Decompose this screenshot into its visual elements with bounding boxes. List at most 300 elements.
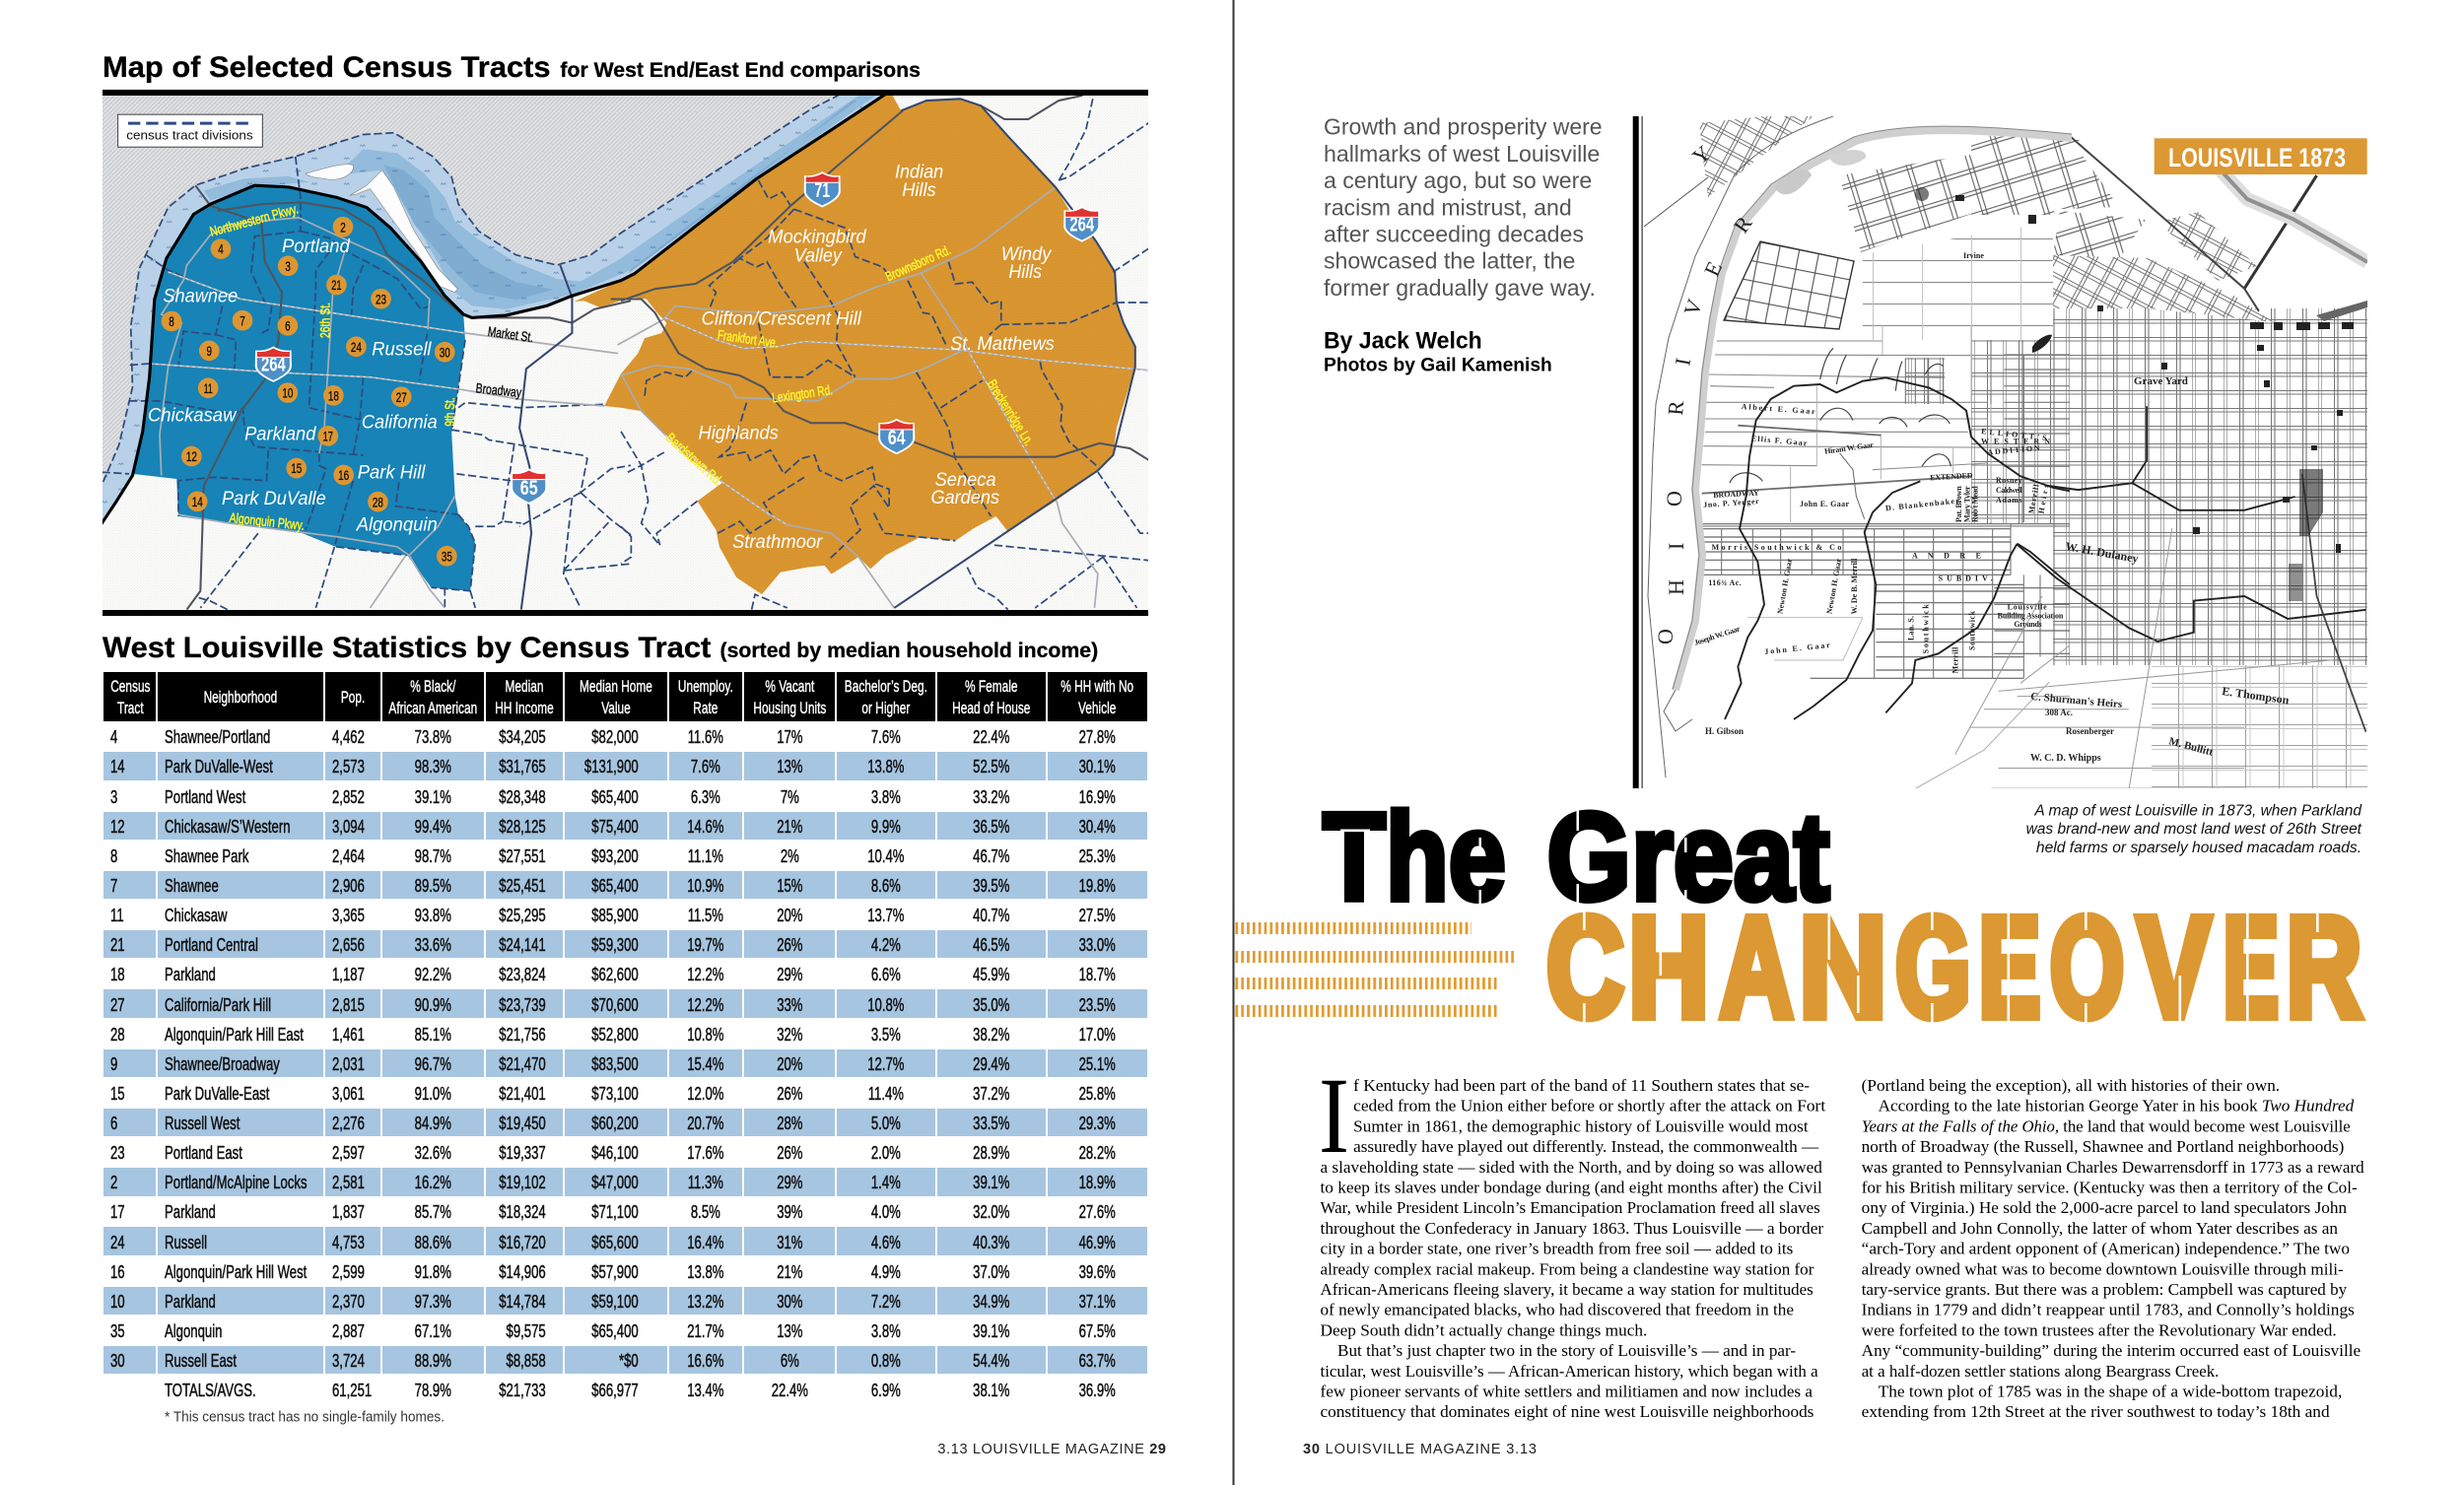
article column 1: ceded from the Union either before or shortly after the attack on Fort: [1353, 1097, 1825, 1115]
row: tract 30: [103, 1346, 1147, 1374]
row: tract 30: 3,724: [332, 1350, 365, 1371]
row: tract 2: 29%: [777, 1172, 802, 1192]
row: tract 6: 84.9%: [415, 1113, 451, 1133]
article column 1: already complex racial makeup. From being a clandestine way station for: [1321, 1259, 1814, 1278]
row: tract 14: 30.1%: [1078, 756, 1115, 776]
pseudo field labels: ELLIOTT'S: [1981, 427, 2048, 442]
row: tract 28: 32%: [777, 1024, 802, 1045]
table header row: Median Home: [580, 678, 652, 696]
road labels: Algonquin Pkwy.: [229, 510, 306, 533]
row: totals and averages: [165, 1380, 1116, 1400]
row: tract 18: 12.2%: [687, 964, 723, 984]
row: tract 18: $23,824: [499, 964, 546, 984]
rail lines: [2244, 175, 2317, 289]
row: tract 9: 96.7%: [415, 1053, 451, 1074]
article column 2: tary-service grants. But there was a problem: Campbell was captured by: [1862, 1280, 2348, 1299]
row: tract 12: 14.6%: [687, 816, 723, 837]
road labels: Northwestern Pkwy.: [208, 201, 300, 239]
row: tract 3: 33.2%: [973, 786, 1009, 807]
article column 1: a slaveholding state — sided with the North, and by doing so was allowed: [1321, 1158, 1822, 1177]
row: tract 7: 7: [110, 875, 117, 896]
row: tract 27: $23,739: [499, 994, 546, 1015]
row: tract 8: 46.7%: [973, 845, 1009, 866]
row: tract 12: $28,125: [499, 816, 546, 837]
neighborhood labels: Parkland: [244, 424, 317, 444]
neighborhood labels: Mockingbird: [768, 228, 867, 248]
pseudo field labels: A N D R E: [1912, 552, 1981, 561]
row: tract 27: [103, 989, 1147, 1018]
row: tract 4: 27.8%: [1078, 726, 1115, 747]
row: tract 15: 12.0%: [687, 1083, 723, 1104]
byline: Photos by Gail Kamenish: [1324, 354, 1552, 375]
byline: [1324, 327, 1552, 375]
article column 1: to keep its slaves under bondage during (and eight months after) the Civil: [1321, 1179, 1822, 1196]
row: tract 14: [103, 752, 1147, 780]
row: tract 2: 2: [110, 1172, 117, 1192]
row: tract 27: 10.8%: [867, 994, 905, 1015]
row: tract 3: 6.3%: [691, 786, 720, 807]
pseudo field labels: D. Blankenbaker: [1885, 496, 1960, 512]
row: tract 14: 2,573: [332, 756, 365, 776]
row: tract 9: [103, 1049, 1147, 1077]
row: tract 9: $21,470: [499, 1053, 546, 1074]
row: totals and averages: 61,251: [332, 1380, 372, 1400]
street labels: Broadway: [475, 380, 522, 400]
headline: The Great: [1323, 787, 1829, 926]
row: tract 28: 85.1%: [415, 1024, 451, 1045]
row: tract 28: 10.8%: [687, 1024, 723, 1045]
row: tract 21: $24,141: [499, 934, 546, 955]
row: tract 14: 13.8%: [867, 756, 905, 776]
row: tract 2: Portland/McAlpine Locks: [165, 1172, 307, 1192]
article column 1: f Kentucky had been part of the band of 11 Southern states that se-: [1353, 1076, 1810, 1095]
row: tract 35: 67.5%: [1078, 1320, 1115, 1341]
pseudo field labels: Building Association: [1998, 612, 2064, 621]
sand bars: [1776, 171, 1812, 195]
row: tract 7: 8.6%: [871, 875, 901, 896]
heading: map of selected census tracts: Map of Selected Census Tracts: [103, 51, 551, 84]
row: tract 15: 3,061: [332, 1083, 365, 1104]
row: tract 16: Algonquin/Park Hill West: [165, 1261, 307, 1282]
row: tract 6: [103, 1109, 1147, 1136]
tract number markers: 9: [207, 344, 212, 359]
row: tract 11: 40.7%: [973, 905, 1009, 925]
headline: Changeover: R: [2287, 888, 2361, 1046]
table header row: Rate: [693, 700, 718, 717]
row: tract 30: 30: [110, 1350, 125, 1371]
row: tract 4: 4,462: [332, 726, 365, 747]
map letters and names: I: [1670, 356, 1695, 368]
row: tract 10: $14,784: [499, 1291, 546, 1312]
row: tract 8: [110, 845, 1116, 866]
row: tract 18: $62,600: [591, 964, 639, 984]
label: Louisville 1873: LOUISVILLE 1873: [2168, 143, 2346, 172]
interstate shields: 64: [888, 426, 906, 449]
row: tract 7: Shawnee: [165, 875, 219, 896]
pseudo field labels: Ellis F. Gaar: [1750, 434, 1808, 447]
row: tract 28: $21,756: [499, 1024, 546, 1045]
row: tract 23: $46,100: [591, 1142, 639, 1163]
neighborhood labels: California: [362, 412, 438, 433]
tract number markers: 24: [351, 340, 362, 355]
table header row: % HH with No: [1061, 678, 1133, 696]
tract number markers: 16: [338, 468, 349, 483]
row: tract 10: Parkland: [165, 1291, 216, 1312]
row: tract 30: 6%: [780, 1350, 798, 1371]
row: tract 24: $65,600: [591, 1232, 639, 1252]
tract number markers: 7: [240, 313, 245, 328]
intro deck text: racism and mistrust, and: [1324, 194, 1572, 220]
map caption: A map of west Louisville in 1873, when Parkland: [2033, 802, 2362, 819]
row: tract 27: 35.0%: [973, 994, 1009, 1015]
tract number markers: 35: [442, 549, 452, 564]
row: tract 9: $83,500: [591, 1053, 639, 1074]
row: tract 14: 14: [110, 756, 125, 776]
row: tract 9: 25.1%: [1078, 1053, 1115, 1074]
row: tract 7: 10.9%: [687, 875, 723, 896]
row: tract 17: 85.7%: [415, 1201, 451, 1222]
row: tract 9: 29.4%: [973, 1053, 1009, 1074]
table header row: Median: [505, 678, 543, 696]
tract number markers: 6: [285, 319, 291, 334]
row: tract 30: Russell East: [165, 1350, 237, 1371]
row: tract 11: 11: [110, 905, 124, 925]
row: tract 14: $131,900: [584, 756, 639, 776]
map letters and names: W. H. Dulaney: [2064, 539, 2140, 566]
article column 2: extending from 12th Street at the river southwest to today’s 18th and: [1862, 1402, 2330, 1421]
row: tract 16: 16: [110, 1261, 125, 1282]
row: tract 3: [110, 786, 1116, 807]
pseudo field labels: Albert E. Gaar: [1742, 402, 1815, 416]
pseudo field labels: Rosney: [1996, 476, 2022, 485]
neighborhood labels: Park Hill: [358, 462, 426, 483]
headline: The Great: The: [1323, 787, 1506, 926]
row: tract 3: $65,400: [591, 786, 639, 807]
pseudo field labels: Adams: [1996, 496, 2022, 505]
road labels: Frankfort Ave.: [717, 327, 780, 351]
row: tract 21: 26%: [777, 934, 802, 955]
row: tract 18: 18: [110, 964, 125, 984]
row: tract 2: 1.4%: [871, 1172, 901, 1192]
indiana hatch area: [99, 89, 879, 493]
article column 2: ony of Virginia.) He sold the 2,000-acre parcel to land speculators John: [1862, 1198, 2348, 1217]
map letters and names: Rosenberger: [2066, 726, 2114, 736]
pseudo field labels: WESTERN: [1981, 438, 2050, 446]
table header row: Bachelor’s Deg.: [845, 678, 927, 696]
table header row: HH Income: [495, 700, 554, 717]
row: tract 6: Russell West: [165, 1113, 240, 1133]
row: tract 2: 39.1%: [973, 1172, 1009, 1192]
row: totals and averages: 36.9%: [1078, 1380, 1115, 1400]
legend: census tract divisions: [118, 114, 262, 147]
pseudo field labels: 116¾ Ac.: [1708, 578, 1742, 587]
map letters and names: M. Bullitt: [2167, 735, 2215, 759]
pseudo field labels: Merrill: [1951, 646, 1960, 673]
row: tract 4: 11.6%: [688, 726, 723, 747]
tract number markers: 18: [328, 389, 339, 404]
article column 2: Indians in 1779 and didn’t reappear until 1783, and Connolly’s holdings: [1862, 1301, 2355, 1319]
pseudo field labels: EXTENDED: [1930, 471, 1973, 482]
row: tract 35: 67.1%: [415, 1320, 451, 1341]
row: tract 17: Parkland: [165, 1201, 216, 1222]
row: tract 17: 32.0%: [973, 1201, 1009, 1222]
row: tract 24: 16.4%: [687, 1232, 723, 1252]
row: tract 18: 18.7%: [1078, 964, 1115, 984]
tract number markers: 30: [440, 345, 450, 360]
row: tract 27: California/Park Hill: [165, 994, 271, 1015]
article column 1: constituency that dominates eight of nine west Louisville neighborhoods: [1321, 1402, 1814, 1421]
pseudo field labels: Louisville: [2008, 602, 2047, 611]
row: tract 10: 34.9%: [973, 1291, 1009, 1312]
neighborhood labels: Algonquin: [356, 515, 438, 536]
row: tract 30: 54.4%: [973, 1350, 1009, 1371]
tract number markers: 23: [376, 292, 386, 306]
intro deck text: after succeeding decades: [1324, 221, 1584, 246]
row: tract 28: [110, 1024, 1116, 1045]
row: tract 7: 89.5%: [415, 875, 451, 896]
article column 1: War, while President Lincoln’s Emancipation Proclamation freed all slaves: [1321, 1198, 1820, 1217]
road labels: Lexington Rd.: [771, 382, 834, 406]
tract number markers: 28: [373, 495, 383, 509]
article column 2: “arch-Tory and ardent opponent of (American) independence.” The two: [1862, 1240, 2350, 1258]
row: tract 2: 16.2%: [415, 1172, 451, 1192]
map letters and names: 308 Ac.: [2045, 708, 2073, 717]
row: tract 21: 2,656: [332, 934, 365, 955]
row: tract 8: 11.1%: [688, 845, 723, 866]
row: tract 24: $16,720: [499, 1232, 546, 1252]
row: tract 14: 13%: [777, 756, 802, 776]
row: tract 4: $82,000: [591, 726, 639, 747]
article column 2: for his British military service. (Kentucky was then a territory of the Col-: [1862, 1179, 2358, 1196]
row: tract 21: [103, 930, 1147, 958]
headline: Changeover: G: [1895, 888, 1971, 1046]
field arcs: [1730, 348, 1951, 483]
intro deck text: former gradually gave way.: [1324, 275, 1596, 301]
table header row: Value: [601, 700, 631, 717]
map: census tracts of Louisville: [99, 89, 1185, 632]
map letters and names: E. Thompson: [2222, 684, 2291, 708]
interstate shields: 264: [1069, 213, 1094, 236]
heading: statistics by census tract: [103, 632, 1098, 664]
article column 2: already owned what was to become downtown Louisville through mili-: [1862, 1259, 2344, 1278]
row: tract 10: [103, 1287, 1147, 1315]
row: tract 15: 11.4%: [868, 1083, 904, 1104]
article column 2: was granted to Pennsylvanian Charles Dewarrensdorff in 1773 as a reward: [1862, 1158, 2364, 1177]
row: tract 18: Parkland: [165, 964, 216, 984]
map letters and names: E: [1699, 257, 1727, 280]
row: tract 3: Portland West: [165, 786, 245, 807]
row: tract 17: [110, 1201, 1116, 1222]
tract number markers: 27: [396, 390, 407, 405]
pseudo field labels: Lan. S.: [1907, 616, 1916, 641]
row: tract 21: 19.7%: [687, 934, 723, 955]
row: tract 30: 88.9%: [415, 1350, 451, 1371]
table header row: Pop.: [341, 689, 365, 707]
row: tract 9: Shawnee/Broadway: [165, 1053, 280, 1074]
row: tract 10: 13.2%: [687, 1291, 723, 1312]
road labels: Bardstown Rd.: [663, 431, 726, 489]
river banks: [1676, 130, 2072, 690]
row: tract 35: 13%: [777, 1320, 802, 1341]
pseudo field labels: Pat. Brown: [1954, 486, 1963, 522]
row: tract 24: 88.6%: [415, 1232, 451, 1252]
neighborhood labels: Valley: [794, 246, 843, 267]
river bank line: [99, 94, 886, 528]
label: Louisville 1873: [2155, 138, 2367, 174]
row: tract 4: $34,205: [499, 726, 546, 747]
pseudo field labels: Rob't Mead: [1971, 486, 1980, 522]
neighborhood labels: Highlands: [699, 424, 779, 444]
row: tract 15: 26%: [777, 1083, 802, 1104]
row: tract 12: 30.4%: [1078, 816, 1115, 837]
row: tract 10: 2,370: [332, 1291, 365, 1312]
row: tract 16: 37.0%: [973, 1261, 1009, 1282]
gray roads: [150, 187, 1149, 608]
article column 2: were forfeited to the town trustees after the Revolutionary War ended.: [1862, 1320, 2337, 1339]
city blocks: [1915, 187, 2354, 601]
row: tract 23: 17.6%: [687, 1142, 723, 1163]
pseudo field labels: Newton H. Gaar: [1775, 558, 1794, 615]
row: tract 3: 7%: [780, 786, 798, 807]
article column 2: The town plot of 1785 was in the shape of a wide-bottom trapezoid,: [1879, 1382, 2342, 1401]
row: tract 27: 12.2%: [687, 994, 723, 1015]
row: tract 3: 39.1%: [415, 786, 451, 807]
headline: Changeover: V: [2137, 888, 2211, 1046]
row: tract 27: 27: [110, 994, 125, 1015]
row: tract 6: 29.3%: [1078, 1113, 1115, 1133]
row: tract 23: Portland East: [165, 1142, 242, 1163]
neighborhood labels: Portland: [282, 236, 351, 257]
headline: Changeover: O: [2050, 888, 2124, 1046]
article column 1: few pioneer servants of white settlers and militiamen and now includes a: [1321, 1382, 1813, 1401]
row: tract 27: 23.5%: [1078, 994, 1115, 1015]
row: totals and averages: 6.9%: [871, 1380, 901, 1400]
row: tract 6: 6: [110, 1113, 117, 1133]
neighborhood labels: Hills: [902, 180, 936, 201]
tract number markers: 2: [340, 220, 346, 235]
headline: Changeover: H: [1628, 888, 1709, 1046]
intro deck text: a century ago, but so were: [1324, 168, 1592, 193]
road labels: [208, 201, 1037, 533]
map letters and names: Y: [1687, 140, 1715, 169]
row: tract 16: 13.8%: [687, 1261, 723, 1282]
row: tract 21: 21: [110, 934, 125, 955]
row: tract 15: $73,100: [591, 1083, 639, 1104]
row: tract 11: 93.8%: [415, 905, 451, 925]
row: tract 7: $65,400: [591, 875, 639, 896]
row: tract 10: $59,100: [591, 1291, 639, 1312]
row: tract 6: 20.7%: [687, 1113, 723, 1133]
row: tract 24: 31%: [777, 1232, 802, 1252]
table: west Louisville statistics: [103, 672, 1147, 1400]
row: tract 23: 28.2%: [1078, 1142, 1115, 1163]
row: tract 6: 33.5%: [973, 1113, 1009, 1133]
neighborhood labels: Windy: [1001, 244, 1053, 265]
neighborhood labels: Russell: [372, 340, 432, 361]
row: tract 12: 12: [110, 816, 125, 837]
row: tract 4: [110, 726, 1116, 747]
row: tract 30: $8,858: [506, 1350, 546, 1371]
article column 2: Years at the Falls of the Ohio, the land that would become west Louisville: [1862, 1116, 2351, 1135]
row: tract 11: 20%: [777, 905, 802, 925]
row: tract 15: 15: [110, 1083, 125, 1104]
interstate shields: 264: [261, 353, 286, 376]
row: tract 17: 4.0%: [871, 1201, 901, 1222]
table header row: Housing Units: [753, 700, 826, 717]
pseudo field labels: Merrill: [2026, 483, 2041, 514]
neighborhood labels: St. Matthews: [950, 334, 1055, 355]
table header row: Vehicle: [1078, 700, 1116, 717]
row: tract 4: Shawnee/Portland: [165, 726, 270, 747]
interstate shields: [255, 171, 1100, 505]
row: tract 7: 2,906: [332, 875, 365, 896]
headline: Changeover: E: [1979, 888, 2040, 1046]
headline: Changeover: E: [2224, 888, 2279, 1046]
row: tract 8: 2,464: [332, 845, 365, 866]
row: tract 21: $59,300: [591, 934, 639, 955]
pseudo field labels: SUBDIV.: [1939, 574, 1993, 582]
row: tract 8: 10.4%: [867, 845, 905, 866]
row: tract 15: 91.0%: [415, 1083, 451, 1104]
row: tract 18: [110, 964, 1116, 984]
row: tract 6: 28%: [777, 1113, 802, 1133]
row: tract 35: $65,400: [591, 1320, 639, 1341]
row: tract 28: 28: [110, 1024, 125, 1045]
row: tract 3: $28,348: [499, 786, 546, 807]
row: tract 3: 3: [110, 786, 117, 807]
neighborhood labels: Hills: [1008, 262, 1042, 283]
neighborhood labels: Clifton/Crescent Hill: [702, 308, 862, 329]
row: tract 14: 98.3%: [415, 756, 451, 776]
table header row: Neighborhood: [204, 689, 278, 707]
row: tract 10: 10: [110, 1291, 125, 1312]
row: tract 12: 9.9%: [871, 816, 901, 837]
row: tract 12: 21%: [777, 816, 802, 837]
row: tract 28: 1,461: [332, 1024, 365, 1045]
map letters and names: R: [1729, 211, 1757, 237]
row: tract 24: 4.6%: [871, 1232, 901, 1252]
article column 2: According to the late historian George Yater in his book Two Hundred: [1879, 1097, 2355, 1115]
article column 1: city in a border state, one river’s breadth from free soil — added to its: [1321, 1240, 1793, 1258]
row: tract 16: $14,906: [499, 1261, 546, 1282]
row: tract 11: 11.5%: [688, 905, 723, 925]
row: tract 8: $93,200: [591, 845, 639, 866]
intro deck text: showcased the latter, the: [1324, 248, 1575, 274]
row: tract 16: $57,900: [591, 1261, 639, 1282]
page divider: [1232, 0, 1234, 1485]
row: tract 28: $52,800: [591, 1024, 639, 1045]
east creek lines: [2045, 406, 2147, 490]
east end region: [574, 96, 1135, 594]
row: tract 6: $60,200: [591, 1113, 639, 1133]
row: tract 17: 8.5%: [691, 1201, 720, 1222]
row: tract 16: 91.8%: [415, 1261, 451, 1282]
article column 2: north of Broadway (the Russell, Shawnee and Portland neighborhoods): [1862, 1137, 2344, 1156]
row: tract 27: 90.9%: [415, 994, 451, 1015]
falls of the Ohio shoreline: [2216, 174, 2367, 268]
neighborhood labels: Park DuValle: [222, 489, 326, 509]
tract number markers: 4: [218, 242, 224, 257]
row: tract 11: Chickasaw: [165, 905, 227, 925]
footnote: * This census tract has no single-family homes.: [165, 1410, 445, 1426]
decorative stripes: [1234, 922, 1515, 1017]
row: tract 7: 15%: [777, 875, 802, 896]
row: tract 17: 39%: [777, 1201, 802, 1222]
row: tract 12: 3,094: [332, 816, 365, 837]
row: tract 11: 3,365: [332, 905, 365, 925]
row: tract 14: Park DuValle-West: [165, 756, 273, 776]
article column 1: Deep South didn’t actually change things much.: [1321, 1320, 1647, 1339]
